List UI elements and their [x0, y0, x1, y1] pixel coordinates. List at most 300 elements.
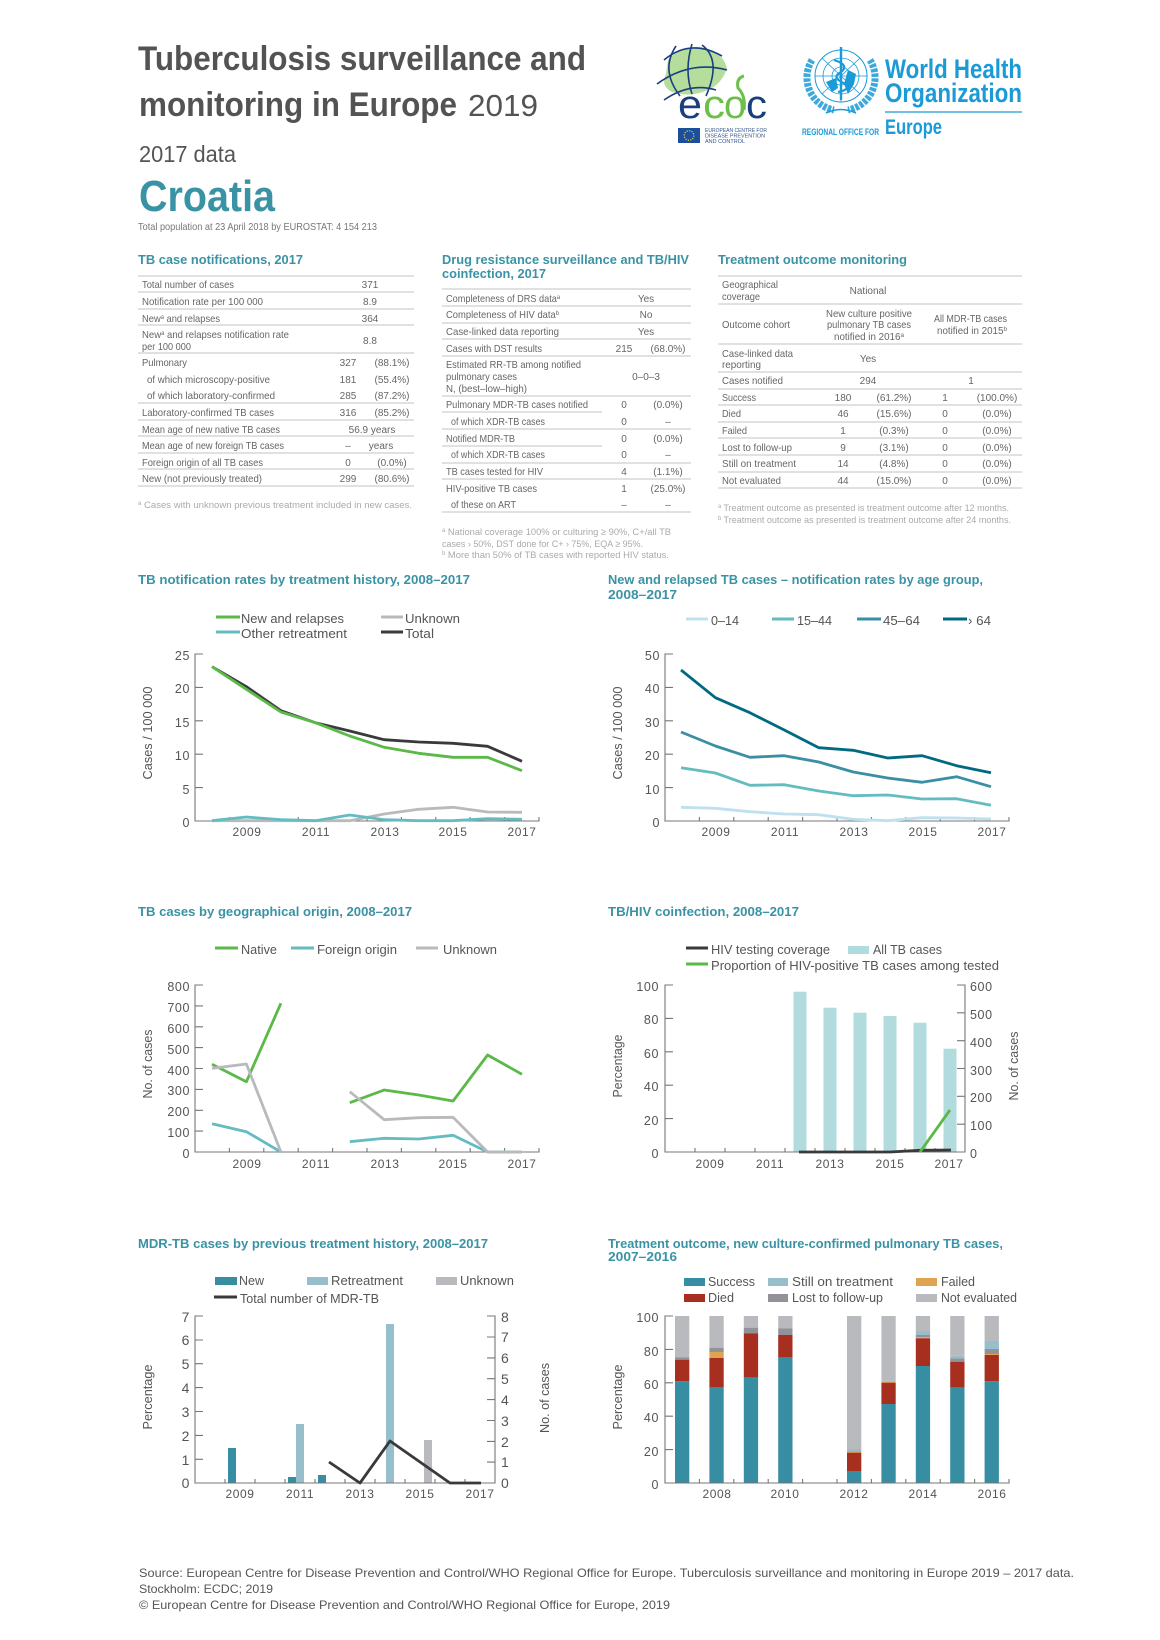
table: row labels: and relapses: [164, 313, 220, 325]
bars: all TB cases: [794, 992, 956, 1152]
legend: Failed: [941, 1274, 975, 1289]
table: row labels: Outcome cohort: [722, 319, 790, 331]
title: [138, 40, 586, 124]
ECDC full name: EUROPEAN CENTRE FOR: [705, 128, 767, 134]
source footer: [139, 1566, 1074, 1612]
heading: MDR-TB cases by previous treatment history, 2008–2017: [138, 1237, 488, 1251]
axes: 2014: [908, 1487, 938, 1501]
footnotes: cases › 50%, DST done for C+ › 75%, EQA ≥ 95%.: [442, 539, 643, 550]
table: values: 0: [942, 426, 948, 437]
heading: Treatment outcome, new culture-confirmed pulmonary TB cases,: [608, 1237, 1003, 1251]
ECDC full name: [705, 128, 767, 145]
table: row labels: Lost to follow-up: [722, 442, 792, 454]
footnotes: [718, 503, 1011, 526]
axes: 2015: [405, 1487, 435, 1501]
table: values: 0: [942, 443, 948, 454]
table: values: (0.0%): [653, 434, 683, 445]
icon: ECDC globe: [657, 44, 727, 100]
table: row labels: New (not previously treated): [142, 473, 262, 485]
heading: Treatment outcome monitoring: [718, 253, 907, 267]
axes: 0: [651, 1147, 659, 1161]
table: row labels: [722, 279, 796, 487]
table: row labels: [446, 293, 588, 511]
table: row labels: of which XDR-TB cases: [451, 416, 545, 428]
table: values: 44: [837, 476, 849, 487]
panel: Treatment outcome monitoring: [718, 253, 1022, 526]
axes: 20: [175, 682, 190, 696]
axes: 80: [644, 1345, 659, 1359]
axes: 600: [167, 1022, 190, 1036]
table: row labels: per 100 000: [142, 341, 191, 353]
axes: 2017: [977, 825, 1007, 839]
axes: 7: [501, 1329, 509, 1345]
table: row labels: of which microscopy-positive: [147, 374, 270, 386]
chart panel: Treatment outcome: [608, 1237, 1017, 1501]
WHO wordmark: Organization: [885, 78, 1022, 108]
table: values: (87.2%): [374, 391, 410, 402]
axes: 200: [167, 1105, 190, 1119]
table: values: 371: [362, 280, 379, 291]
subtitle: data year: 2017 data: [139, 141, 236, 167]
axes: 20: [644, 1114, 659, 1128]
legend: Lost to follow-up: [792, 1290, 883, 1305]
table: values: 299: [340, 474, 357, 485]
table: row labels: Notified MDR-TB: [446, 433, 515, 445]
table: values: 285: [340, 391, 357, 402]
axes: 50: [645, 649, 660, 663]
footnotes: b: [718, 516, 722, 522]
legend: Total number of MDR-TB: [240, 1291, 379, 1306]
axes: 2016: [977, 1487, 1007, 1501]
axes: 100: [636, 1311, 659, 1325]
table: row labels: N, (best–low–high): [446, 383, 527, 395]
ecdc wordmark: e: [678, 83, 702, 127]
axes: 80: [644, 1013, 659, 1027]
table: values: (100.0%): [977, 393, 1017, 404]
axes: 2013: [370, 825, 400, 839]
heading: New and relapsed TB cases – notification rates by age group,: [608, 573, 983, 587]
table: row labels: b: [556, 310, 559, 317]
heading: [608, 1237, 1003, 1264]
axes: No. of cases: [538, 1363, 552, 1433]
footnotes: More than 50% of TB cases with reported HIV status.: [445, 550, 669, 561]
axes: 500: [167, 1043, 190, 1057]
heading: 2007–2016: [608, 1250, 677, 1264]
table: values: 8.9: [363, 297, 377, 308]
axes: 2: [501, 1434, 509, 1450]
table: values: pulmonary TB cases: [827, 320, 911, 331]
table: values: –: [665, 417, 671, 428]
axes: Percentage: [141, 1364, 155, 1430]
axes: 30: [645, 716, 660, 730]
legend: Foreign origin: [317, 942, 397, 957]
table: row labels: Completeness of HIV data: [446, 309, 569, 321]
table: values: (15.0%): [876, 476, 912, 487]
legend: Unknown: [443, 942, 497, 957]
table: row labels: Cases notified: [722, 375, 783, 387]
footnotes: [442, 527, 671, 561]
axes: 300: [970, 1064, 993, 1078]
table: values: notified in 2015: [937, 326, 1005, 337]
axes: 400: [970, 1036, 993, 1050]
axes: 20: [644, 1445, 659, 1459]
table: row labels: HIV-positive TB cases: [446, 483, 537, 495]
table: values: 4: [621, 467, 627, 478]
table: values: Yes: [638, 294, 654, 305]
line series: [212, 667, 522, 821]
table: values: 9: [840, 443, 846, 454]
table: row labels: Case-linked data: [722, 348, 793, 360]
table: row labels: Notification rate per 100 000: [142, 296, 263, 308]
ECDC full name: DISEASE PREVENTION: [705, 134, 765, 140]
legend: HIV testing coverage: [711, 942, 830, 957]
panel: TB case notifications: [138, 253, 414, 511]
WHO wordmark: [802, 54, 1022, 139]
WHO wordmark: World Health: [885, 54, 1022, 84]
ecdc wordmark: c: [746, 83, 767, 127]
axes: 2017: [507, 1157, 537, 1171]
WHO wordmark: REGIONAL OFFICE FOR: [802, 127, 879, 138]
table: values: a: [900, 332, 904, 339]
axes: [611, 1311, 1009, 1501]
legend: [216, 611, 460, 641]
table: values: 0–0–3: [632, 372, 660, 383]
axes: 5: [501, 1371, 509, 1387]
table: values: National: [850, 286, 886, 297]
table: values: –: [345, 441, 351, 452]
table: row labels: Not evaluated: [722, 475, 781, 487]
table: values: b: [1003, 326, 1007, 333]
axes: 2015: [908, 825, 938, 839]
table: row labels: Geographical: [722, 279, 778, 291]
table: row labels: a: [161, 330, 165, 337]
legend: [214, 1273, 514, 1306]
axes: 25: [175, 649, 190, 663]
footnote: Cases with unknown previous treatment included in new cases.: [141, 500, 412, 511]
table: values: (0.0%): [377, 458, 407, 469]
table: values: (0.0%): [653, 400, 683, 411]
axes: 1: [182, 1452, 190, 1468]
axes: 200: [970, 1091, 993, 1105]
table: row labels: Total number of cases: [142, 279, 234, 291]
table: values: 0: [942, 459, 948, 470]
table: values: 14: [837, 459, 849, 470]
source footer: Stockholm: ECDC; 2019: [139, 1582, 273, 1596]
axes: 5: [182, 783, 190, 797]
table: values: –: [665, 450, 671, 461]
axes: 0: [651, 1478, 659, 1492]
header block: [138, 40, 586, 233]
footnotes: a: [718, 504, 722, 510]
table: row labels: Mean age of new native TB cases: [142, 424, 280, 436]
axes: 3: [501, 1413, 509, 1429]
heading: TB/HIV coinfection, 2008–2017: [608, 905, 799, 919]
legend: Other retreatment: [241, 626, 347, 641]
axes: 2015: [875, 1157, 905, 1171]
heading: [608, 573, 983, 602]
table: values: 0: [621, 434, 627, 445]
line series: [212, 1003, 522, 1152]
table: row labels: a: [161, 314, 164, 321]
population note: Total population at 23 April 2018 by EUROSTAT: 4 154 213: [138, 221, 377, 233]
table: values: 8.8: [363, 336, 377, 347]
chart panel: TB notification rates by treatment history: [138, 573, 539, 839]
table: row labels: pulmonary cases: [446, 371, 517, 383]
footnotes: Treatment outcome as presented is treatment outcome after 24 months.: [721, 515, 1011, 526]
axes: 15: [175, 716, 190, 730]
heading: 2008–2017: [608, 588, 677, 602]
bars: [228, 1324, 432, 1483]
table: values: (3.1%): [879, 443, 909, 454]
line series: [681, 670, 991, 821]
footnotes: a: [442, 528, 446, 534]
legend: [686, 613, 991, 628]
axes: 2009: [232, 825, 262, 839]
table: values: 0: [942, 476, 948, 487]
axes: 2011: [302, 1157, 330, 1171]
axes: 2015: [438, 825, 468, 839]
axes: 7: [182, 1309, 190, 1325]
axes: 2017: [465, 1487, 495, 1501]
line series: [799, 1110, 951, 1152]
axes: 20: [645, 749, 660, 763]
axes: 2013: [345, 1487, 375, 1501]
axes: 4: [182, 1380, 190, 1396]
table: values: 215: [616, 344, 633, 355]
table: values: notified in 2016: [834, 332, 902, 343]
table: values: (1.1%): [653, 467, 683, 478]
axes: 2013: [839, 825, 869, 839]
legend: Proportion of HIV-positive TB cases among tested: [711, 958, 999, 973]
chart panel: TB/HIV coinfection: [608, 905, 1021, 1171]
axes: 2011: [302, 825, 330, 839]
axes: 2009: [701, 825, 731, 839]
table: values: 364: [362, 314, 379, 325]
footnotes: National coverage 100% or culturing ≥ 90%, C+/all TB: [445, 527, 671, 538]
legend: 0–14: [711, 613, 739, 628]
table: values: (25.0%): [650, 484, 686, 495]
axes: [141, 980, 539, 1171]
table: row labels: Laboratory-confirmed TB cases: [142, 407, 274, 419]
axes: [141, 1309, 552, 1501]
legend: 15–44: [797, 613, 832, 628]
axes: 2009: [225, 1487, 255, 1501]
axes: No. of cases: [1007, 1032, 1021, 1100]
line: total number of MDR-TB: [329, 1441, 481, 1483]
axes: 2010: [770, 1487, 800, 1501]
table: values: Yes: [638, 327, 654, 338]
table: row labels: Failed: [722, 425, 747, 437]
table: values: 180: [835, 393, 852, 404]
table: values: 327: [340, 358, 357, 369]
table: values: –: [621, 500, 627, 511]
table: values: (15.6%): [876, 409, 912, 420]
title: Tuberculosis surveillance and: [138, 40, 586, 78]
source footer: Source: European Centre for Disease Prevention and Control/WHO Regional Office for Europe. Tuberculosis surveillance and monitoring in Europe 2019 – 2017 data.: [139, 1566, 1074, 1580]
legend: All TB cases: [873, 942, 942, 957]
heading: Drug resistance surveillance and TB/HIV: [442, 253, 690, 267]
table: values: 0: [621, 417, 627, 428]
table: values: (55.4%): [374, 375, 410, 386]
title: 2019: [468, 88, 538, 123]
table: row labels: [142, 279, 289, 485]
table: values: 294: [860, 376, 877, 387]
axes: 400: [167, 1064, 190, 1078]
legend: › 64: [968, 613, 991, 628]
axes: 2008: [702, 1487, 732, 1501]
axes: 500: [970, 1008, 993, 1022]
table: row labels: Case-linked data reporting: [446, 326, 559, 338]
table: row labels: a: [557, 294, 560, 301]
chart panel: notification rates by age group: [608, 573, 1009, 839]
heading: TB case notifications, 2017: [138, 253, 303, 267]
table: row labels: Estimated RR-TB among notified: [446, 359, 581, 371]
table: values: New culture positive: [826, 309, 912, 320]
ecdc wordmark: c: [703, 83, 725, 127]
axes: 2017: [934, 1157, 964, 1171]
table: values: 1: [968, 376, 974, 387]
axes: 700: [167, 1001, 190, 1015]
axes: 1: [501, 1454, 509, 1470]
legend: New: [239, 1273, 265, 1288]
table: values: years: [369, 441, 393, 452]
legend: 45–64: [883, 613, 920, 628]
table: row labels: Completeness of DRS data: [446, 293, 573, 305]
axes: 8: [501, 1309, 509, 1325]
axes: 6: [501, 1350, 509, 1366]
axes: 2015: [438, 1157, 468, 1171]
table: row labels: and relapses notification rate: [164, 329, 289, 341]
axes: Percentage: [611, 1034, 625, 1098]
table: values: (68.0%): [650, 344, 686, 355]
heading: TB cases by geographical origin, 2008–2017: [138, 905, 412, 919]
table: values: (0.0%): [982, 476, 1012, 487]
axes: 60: [644, 1378, 659, 1392]
panel: Drug resistance surveillance and TB/HIV coinfection: [442, 253, 691, 561]
axes: 6: [182, 1332, 190, 1348]
heading: TB notification rates by treatment history, 2008–2017: [138, 573, 470, 587]
legend: Retreatment: [331, 1273, 403, 1288]
table: row labels: New: [142, 329, 163, 341]
logo: WHO Europe: [802, 47, 1022, 139]
icon: WHO emblem: [807, 47, 875, 113]
axes: 3: [182, 1404, 190, 1420]
legend: Still on treatment: [792, 1274, 893, 1289]
chart panel: MDR-TB cases by previous treatment history: [138, 1237, 552, 1501]
footnotes: b: [442, 551, 446, 557]
table: values: 1: [840, 426, 846, 437]
axes: 0: [182, 1475, 190, 1491]
table: values: –: [665, 500, 671, 511]
table: values: 1: [942, 393, 948, 404]
axes: 40: [644, 1080, 659, 1094]
table: values: [340, 280, 410, 485]
axes: 10: [645, 783, 660, 797]
axes: 2011: [286, 1487, 314, 1501]
axes: 2009: [232, 1157, 262, 1171]
axes: 2012: [839, 1487, 869, 1501]
table: values: (0.0%): [982, 409, 1012, 420]
country name: Croatia: [139, 172, 275, 221]
table: values: [826, 286, 1017, 487]
axes: 2009: [695, 1157, 725, 1171]
ecdc wordmark: [678, 76, 767, 127]
legend: [686, 942, 999, 973]
axes: 5: [182, 1356, 190, 1372]
stacked bars: [675, 1316, 999, 1483]
axes: 0: [501, 1475, 509, 1491]
table: values: (85.2%): [374, 408, 410, 419]
axes: 2011: [771, 825, 799, 839]
axes: 0: [652, 816, 660, 830]
table: values: 46: [837, 409, 849, 420]
table: row labels: Died: [722, 408, 741, 420]
axes: 100: [970, 1119, 993, 1133]
table: row labels: of these on ART: [451, 499, 517, 511]
WHO wordmark: Europe: [885, 116, 942, 139]
axes: [141, 649, 539, 839]
axes: 0: [970, 1147, 978, 1161]
axes: [611, 980, 1021, 1171]
heading: coinfection, 2017: [442, 267, 546, 281]
axes: 10: [175, 749, 190, 763]
table: values: 0: [942, 409, 948, 420]
source footer: © European Centre for Disease Prevention and Control/WHO Regional Office for Europe, 2019: [139, 1598, 670, 1612]
axes: 40: [645, 682, 660, 696]
axes: 100: [636, 980, 659, 994]
axes: No. of cases: [141, 1030, 155, 1098]
chart panel: TB cases by geographical origin: [138, 905, 539, 1171]
table: row labels: Cases with DST results: [446, 343, 542, 355]
table: values: (0.0%): [982, 459, 1012, 470]
table: values: No: [640, 310, 653, 321]
logo: ECDC: [657, 44, 767, 145]
table: values: (88.1%): [374, 358, 410, 369]
table: values: 0: [621, 450, 627, 461]
footnotes: Treatment outcome as presented is treatment outcome after 12 months.: [721, 503, 1009, 514]
axes: Cases / 100 000: [611, 686, 625, 780]
axes: 600: [970, 980, 993, 994]
axes: 60: [644, 1047, 659, 1061]
axes: 2: [182, 1428, 190, 1444]
table: values: 0: [345, 458, 351, 469]
ECDC full name: AND CONTROL: [705, 139, 745, 145]
footnote: a: [138, 501, 142, 507]
table: row labels: of which XDR-TB cases: [451, 449, 545, 461]
table: values: (80.6%): [374, 474, 410, 485]
axes: 0: [182, 816, 190, 830]
legend: Died: [708, 1290, 734, 1305]
axes: Cases / 100 000: [141, 686, 155, 780]
table: row labels: TB cases tested for HIV: [446, 466, 543, 478]
table: values: (4.8%): [879, 459, 909, 470]
legend: [215, 942, 497, 957]
legend: Native: [241, 942, 277, 957]
axes: 100: [167, 1126, 190, 1140]
axes: 2011: [756, 1157, 784, 1171]
table: row labels: Pulmonary: [142, 357, 188, 369]
table: row labels: of which laboratory-confirmed: [147, 390, 275, 402]
axes: 800: [167, 980, 190, 994]
axes: Percentage: [611, 1364, 625, 1430]
table: values: 1: [621, 484, 627, 495]
heading: [442, 253, 690, 281]
table: values: [616, 294, 686, 511]
table: row labels: Success: [722, 392, 756, 404]
table: row labels: Pulmonary MDR-TB cases notified: [446, 399, 588, 411]
axes: 0: [182, 1147, 190, 1161]
axes: 4: [501, 1392, 509, 1408]
